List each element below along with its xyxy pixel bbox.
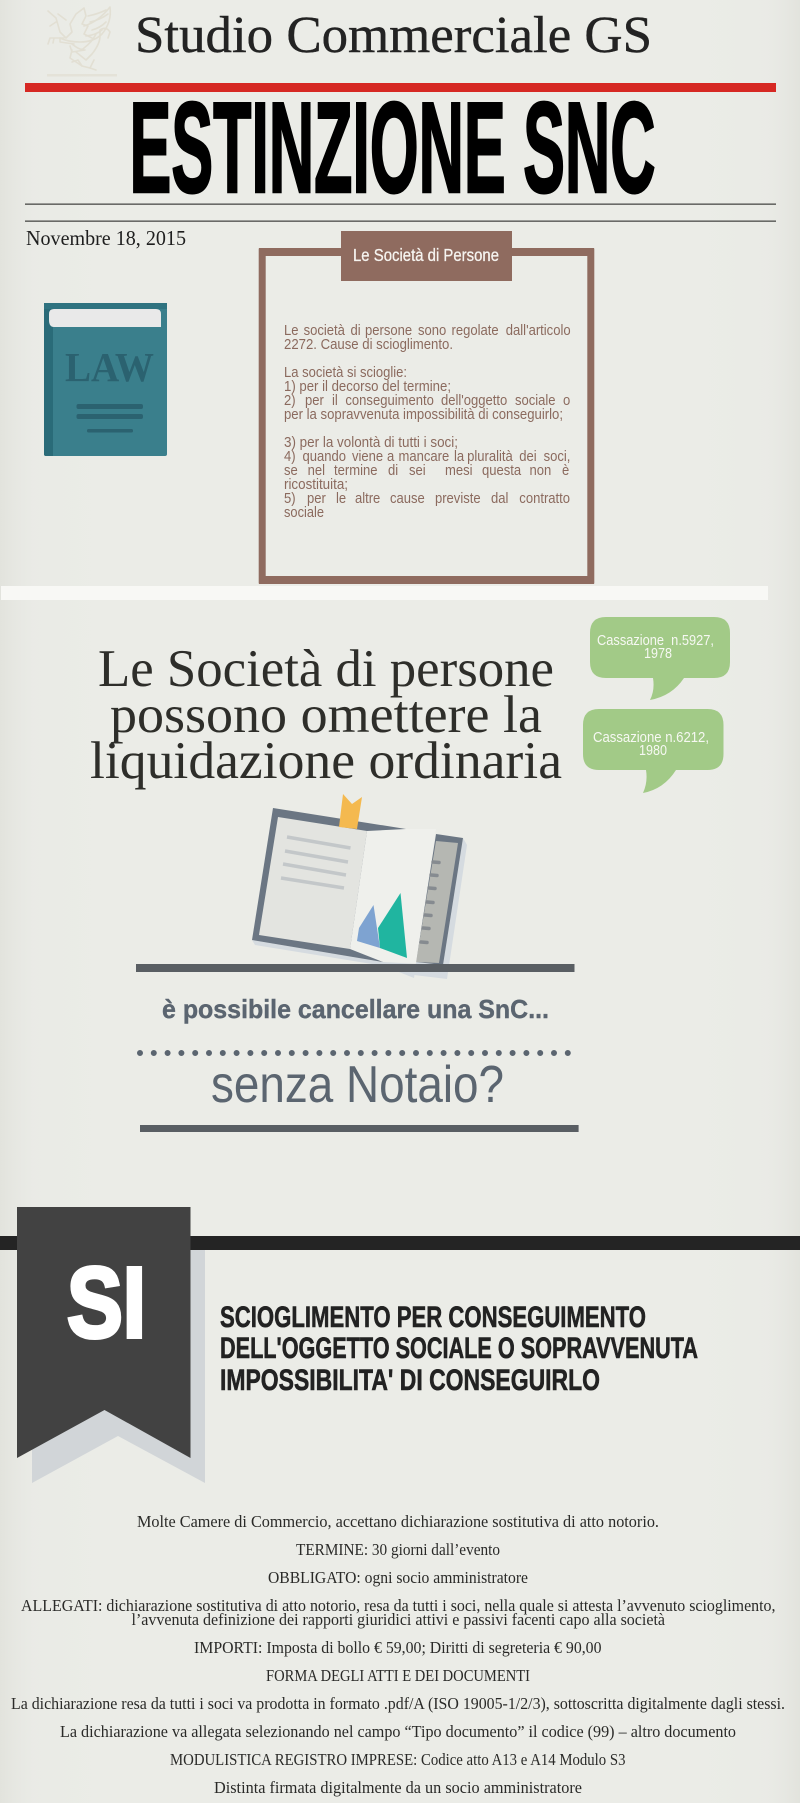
dotted divider (140, 1050, 569, 1056)
panel body text: 4) (284, 448, 296, 464)
panel body text: non (530, 462, 551, 478)
heading: Le Società di persone possono omettere la liquidazione ordinaria (90, 640, 562, 790)
panel body text: termine (334, 462, 378, 478)
panel body text: ricostituita; (284, 477, 348, 493)
panel body text: sociale (515, 392, 556, 408)
body text: procedure details: La dichiarazione va allegata selezionando nel campo “Tipo documento” il codice (99) – altro documento (60, 1722, 736, 1741)
body text: procedure details: TERMINE: 30 giorni dall’evento (296, 1540, 500, 1559)
panel body text: viene (352, 448, 383, 464)
panel body text: questa (482, 462, 522, 478)
heading: scioglimento per conseguimento: IMPOSSIBILITA' DI CONSEGUIRLO (220, 1364, 600, 1397)
callout: Cassazione n.5927: 1978 (644, 646, 672, 662)
logo caption: faint illegible line (47, 74, 117, 76)
panel: Le Società di Persone (259, 231, 594, 584)
panel body text: sociale (284, 505, 324, 521)
pale strip between sections (1, 586, 768, 600)
panel body text: il (332, 392, 338, 408)
panel body text: altre (355, 490, 381, 506)
panel body text: di (388, 462, 398, 478)
closing bar (140, 1125, 579, 1132)
panel body text: dell'oggetto (441, 392, 508, 408)
icon: law book: LAW (65, 344, 154, 390)
panel body text: quando (302, 448, 346, 464)
body text: procedure details (11, 1512, 785, 1797)
black band (0, 1236, 800, 1250)
icon: open book with chart (252, 794, 467, 979)
panel body text: mancare (399, 448, 450, 464)
date: Novembre 18, 2015 (26, 226, 186, 250)
red rule (25, 83, 776, 92)
icon: law book (44, 303, 167, 456)
callout: Cassazione n.6212 (583, 709, 724, 793)
callout: Cassazione n.5927: Cassazione n.5927, (597, 633, 714, 649)
question text: senza Notaio?: senza Notaio? (211, 1056, 504, 1114)
panel body text: sono (418, 322, 447, 338)
panel body text: cause (390, 490, 425, 506)
panel body text: regolate (452, 322, 499, 338)
panel body text: a (387, 448, 395, 464)
body text: procedure details: l’avvenuta definizione dei rapporti giuridici attivi e passivi facenti capo alla società (132, 1610, 665, 1629)
panel body text: dal (491, 490, 508, 506)
panel body text: sei (409, 462, 426, 478)
double header rules (25, 204, 776, 222)
panel body text: dei (519, 448, 537, 464)
callout: Cassazione n.6212: 1980 (639, 743, 667, 759)
heading: scioglimento per conseguimento: SCIOGLIMENTO PER CONSEGUIMENTO (220, 1301, 646, 1334)
body text: procedure details: FORMA DEGLI ATTI E DEI DOCUMENTI (266, 1666, 530, 1685)
panel body text: società (304, 322, 345, 338)
panel body text: è (562, 462, 570, 478)
ribbon: SI: SI (67, 1247, 146, 1359)
panel body text: se (284, 462, 298, 478)
panel body text: per la sopravvenuta impossibilità di conseguirlo; (284, 407, 563, 423)
panel body text: La società si scioglie: (284, 365, 407, 381)
heading: Le Società di persone possono omettere la liquidazione ordinaria: Le Società di persone (98, 640, 554, 698)
body text: procedure details: IMPORTI: Imposta di bollo € 59,00; Diritti di segreteria € 90,00 (194, 1638, 602, 1657)
shelf line (136, 964, 574, 972)
panel body text (284, 322, 571, 521)
panel body text: previste (435, 490, 481, 506)
body text: procedure details: MODULISTICA REGISTRO IMPRESE: Codice atto A13 e A14 Modulo S3 (170, 1750, 626, 1769)
panel body text: 2) (284, 392, 296, 408)
panel body text: per (307, 490, 326, 506)
title: Studio Commerciale GS: Studio Commerciale GS (135, 7, 652, 64)
panel body text: o (563, 392, 571, 408)
panel body text: 2272. Cause di scioglimento. (284, 337, 453, 353)
heading: Le Società di persone possono omettere la liquidazione ordinaria: liquidazione ordinaria (90, 732, 562, 790)
panel body text: persone (365, 322, 412, 338)
panel body text: le (336, 490, 346, 506)
callout: Cassazione n.6212: Cassazione n.6212, (593, 730, 709, 746)
panel heading: Le Società di Persone (353, 245, 499, 265)
panel body text: Le (284, 322, 299, 338)
panel body text: soci, (544, 448, 570, 464)
question text: è possibile cancellare una SnC...: è possibile cancellare una SnC... (162, 994, 549, 1024)
panel body text: 3) per la volontà di tutti i soci; (284, 435, 458, 451)
panel body text: 1) per il decorso del termine; (284, 379, 451, 395)
logo: griffin emblem (48, 7, 110, 70)
panel body text: pluralità (467, 448, 513, 464)
panel body text: di (350, 322, 361, 338)
panel body text: la (454, 448, 464, 464)
panel body text: nel (308, 462, 325, 478)
callout: Cassazione n.5927 (590, 617, 730, 700)
heading: scioglimento per conseguimento (220, 1301, 698, 1397)
panel body text: 5) (284, 490, 296, 506)
panel body text: contratto (519, 490, 570, 506)
body text: procedure details: OBBLIGATO: ogni socio amministratore (268, 1568, 528, 1587)
panel body text: dall'articolo (506, 322, 571, 338)
body text: procedure details: Distinta firmata digitalmente da un socio amministratore (214, 1778, 582, 1797)
body text: procedure details: Molte Camere di Commercio, accettano dichiarazione sostitutiva di atto notorio. (137, 1512, 659, 1531)
heading: Le Società di persone possono omettere la liquidazione ordinaria: possono omettere la (110, 686, 542, 744)
ribbon: SI (17, 1207, 205, 1483)
panel body text: mesi (445, 462, 472, 478)
panel body text: per (305, 392, 324, 408)
panel body text: conseguimento (345, 392, 434, 408)
